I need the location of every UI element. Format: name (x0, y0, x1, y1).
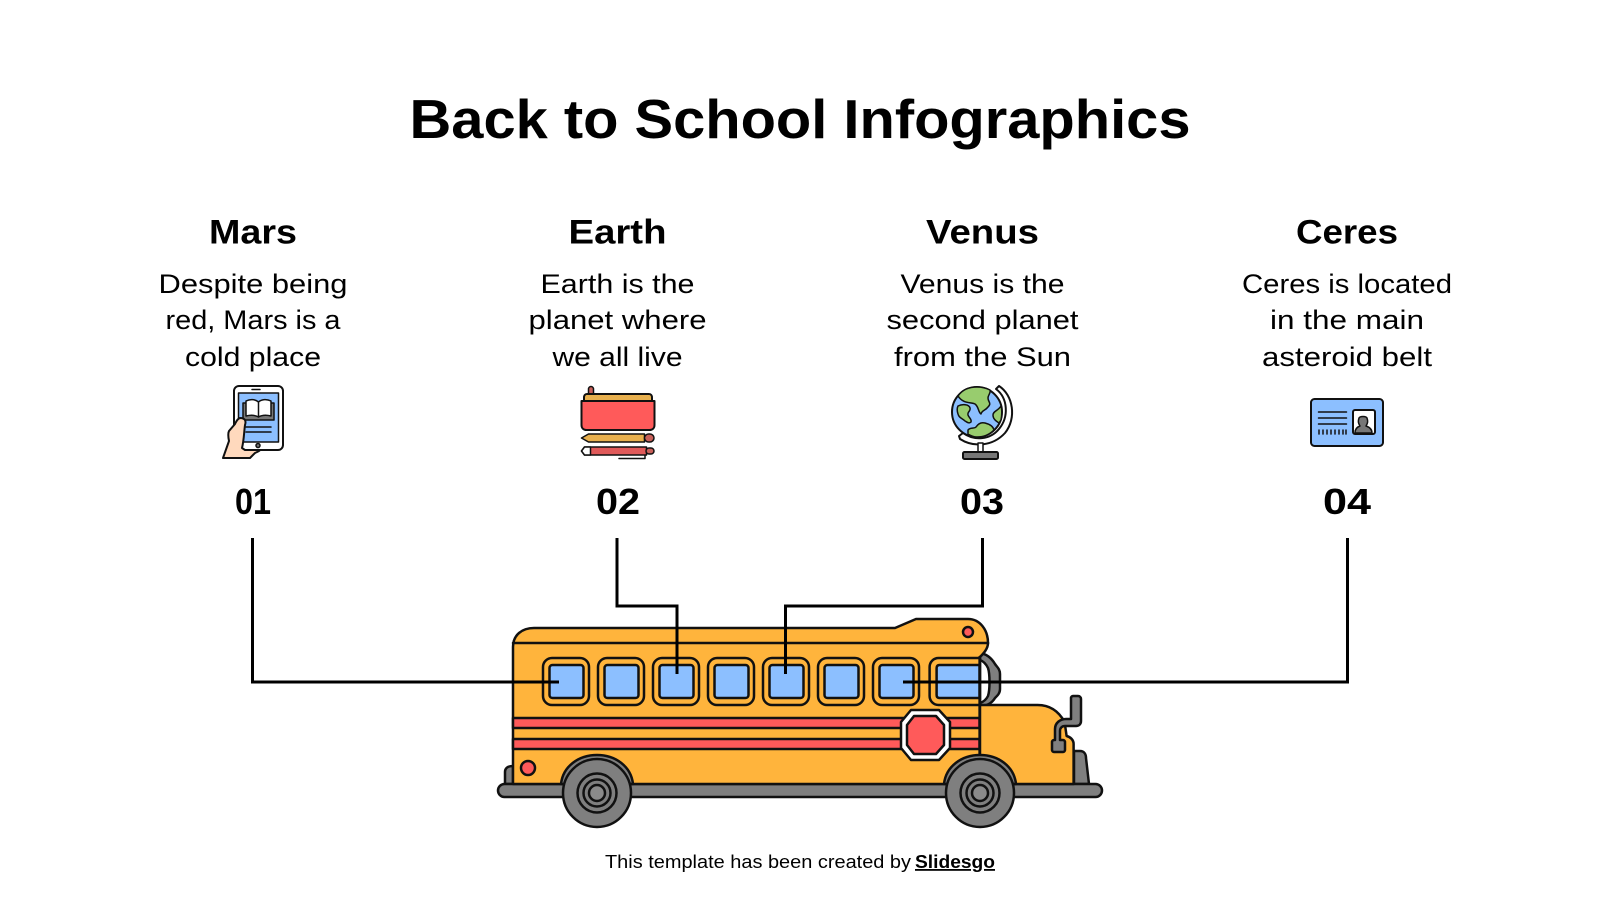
front wheel (944, 755, 1016, 827)
title: Back to School Infographics (410, 88, 1190, 150)
heading: Venus: Venus (926, 214, 1039, 252)
side mirror (1052, 696, 1081, 752)
text block: Ceres description (1242, 269, 1452, 372)
text block: Venus description: from the Sun (894, 342, 1071, 372)
connector 03 (786, 538, 982, 674)
bus hood (980, 705, 1074, 784)
bumper supports (505, 751, 1089, 784)
text block: Venus description (886, 269, 1079, 372)
connector lines from numbers to bus windows (252, 538, 1348, 682)
panel: Ceres (1242, 214, 1452, 522)
icon: ID card (1311, 399, 1383, 446)
school bus (498, 619, 1102, 827)
footer credit: This template has been created by (605, 852, 911, 872)
icon: globe on stand (952, 386, 1012, 459)
text block: Earth description: Earth is the (540, 269, 694, 299)
stop sign (901, 710, 950, 760)
number: 03: 03 (960, 481, 1004, 522)
windows (543, 658, 980, 705)
footer credit: Slidesgo (915, 852, 995, 872)
roof line (513, 642, 988, 644)
rear wheel (561, 755, 633, 827)
number: 04: 04 (1323, 481, 1371, 522)
text block: Ceres description: in the main (1270, 305, 1424, 335)
text block: Earth description (528, 269, 706, 372)
heading: Mars: Mars (209, 214, 297, 252)
bus body (513, 619, 988, 784)
text block: Mars description (158, 269, 348, 372)
connector 01 (252, 538, 559, 682)
icon: tablet with book held in hand (223, 386, 283, 458)
panel: Earth (528, 214, 706, 522)
text block: Earth description: we all live (551, 342, 682, 372)
body front edge (978, 657, 981, 757)
lights (521, 627, 973, 775)
text block: Mars description: Despite being (158, 269, 348, 299)
chassis bar (498, 784, 1102, 797)
panel: Venus (886, 214, 1079, 522)
bus mirror at rear of cab (980, 653, 1000, 706)
text block: Mars description: red, Mars is a (166, 305, 342, 335)
icon: pencil case with pencil and pen (582, 386, 654, 458)
text block: Ceres description: asteroid belt (1262, 342, 1433, 372)
text block: Ceres description: Ceres is located (1242, 269, 1452, 299)
heading: Earth: Earth (568, 214, 666, 252)
connector 04 (903, 538, 1348, 682)
number: 02: 02 (596, 481, 640, 522)
text block: Venus description: Venus is the (900, 269, 1064, 299)
text block: Venus description: second planet (886, 305, 1079, 335)
panel: Mars (158, 214, 348, 522)
number: 01: 01 (235, 481, 271, 522)
connector 02 (617, 538, 677, 674)
heading: Ceres: Ceres (1296, 214, 1398, 252)
red stripes (513, 718, 980, 749)
text block: Mars description: cold place (185, 342, 321, 372)
text block: Earth description: planet where (528, 305, 706, 335)
